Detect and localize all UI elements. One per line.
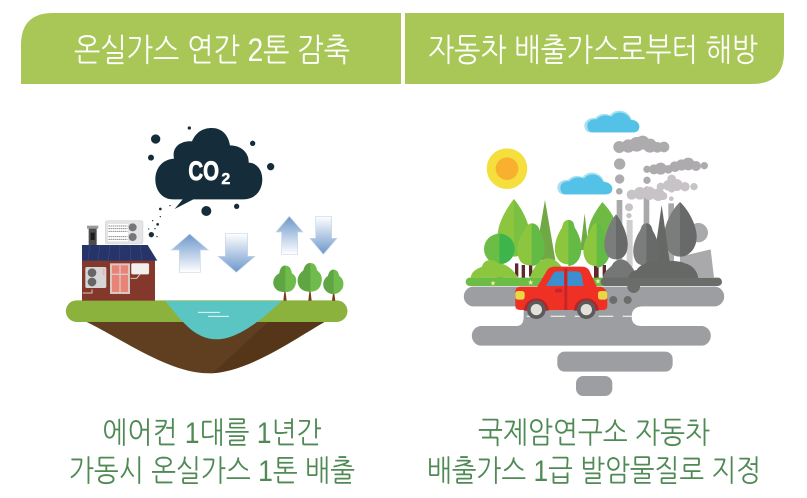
- red car: [515, 267, 607, 319]
- left header banner: [21, 13, 401, 84]
- window: [110, 263, 130, 294]
- island grass: [66, 300, 347, 322]
- sun: [487, 148, 527, 189]
- right header banner: [405, 13, 784, 84]
- chimney: [89, 228, 97, 245]
- road strips: [464, 287, 724, 396]
- right caption: 국제암연구소 자동차: [478, 417, 710, 450]
- green forest: [466, 199, 618, 286]
- left caption: 에어컨 1대를 1년간: [102, 417, 322, 450]
- CO2 label: CO: [188, 156, 219, 186]
- right caption: 배출가스 1급 발암물질로 지정: [427, 455, 761, 488]
- smoke plumes: [613, 136, 708, 218]
- left caption: 가동시 온실가스 1톤 배출: [69, 455, 355, 488]
- left illustration: greenhouse gas island: [66, 126, 347, 373]
- right header title: 자동차 배출가스로부터 해방: [428, 32, 758, 68]
- outdoor unit on roof: [105, 221, 143, 244]
- arrows: [171, 216, 337, 272]
- polluted grey forest: [601, 202, 722, 286]
- three trees: [273, 263, 343, 301]
- CO2 cloud: 2: [221, 171, 230, 188]
- CO2 cloud: [155, 128, 262, 209]
- blue clouds: [557, 111, 639, 194]
- indoor unit: [131, 263, 149, 274]
- right illustration: car and exhaust pollution: [464, 111, 724, 396]
- left header title: 온실가스 연간 2톤 감축: [74, 32, 350, 68]
- exhaust puffs: [609, 280, 640, 304]
- island soil: [86, 322, 325, 373]
- left caption: [69, 417, 355, 488]
- house: [82, 221, 157, 301]
- right caption: [427, 417, 761, 488]
- lake: [165, 301, 282, 339]
- carbon particles: [148, 126, 274, 237]
- factory building: [617, 197, 714, 277]
- outdoor unit on wall: [85, 267, 106, 288]
